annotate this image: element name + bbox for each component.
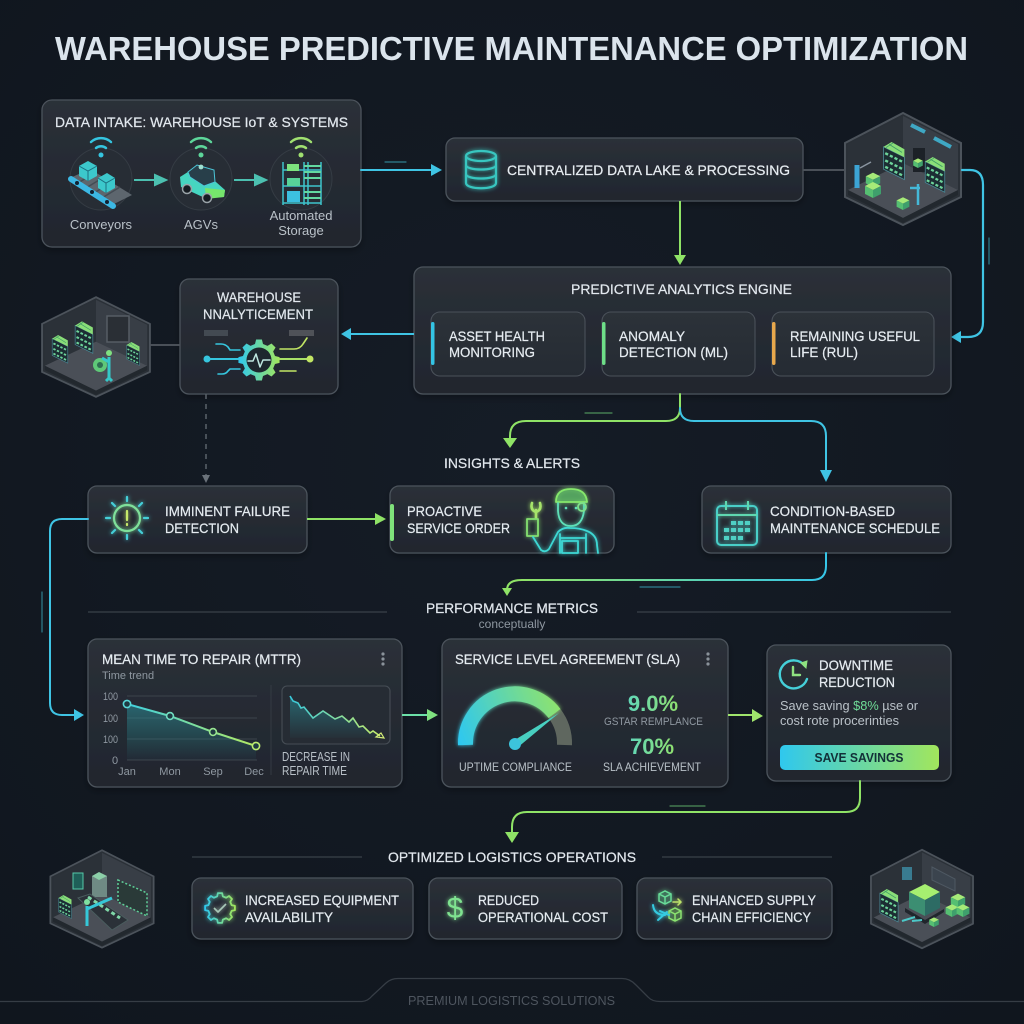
panel: imminent failure xyxy=(88,486,307,553)
card: remaining useful life xyxy=(772,312,934,376)
panel: warehouse analytics xyxy=(180,279,338,394)
icon: menu dots xyxy=(381,652,385,666)
title: WAREHOUSE PREDICTIVE MAINTENANCE OPTIMIZATION xyxy=(55,30,968,67)
panel: predictive analytics engine xyxy=(414,267,951,394)
arrow: MTTR to SLA xyxy=(402,709,438,721)
heading: warehouse: WAREHOUSE xyxy=(217,289,301,305)
panel: downtime reduction xyxy=(767,645,951,781)
card: anomaly detection xyxy=(602,312,755,376)
gauge: uptime compliance xyxy=(465,694,565,750)
panel: proactive service order xyxy=(390,486,614,553)
arrow: dashed down to imminent failure xyxy=(202,394,210,483)
label: proactive: PROACTIVE xyxy=(407,503,482,519)
label: automated storage: Automated xyxy=(270,208,332,223)
card: reduced operational cost xyxy=(429,878,622,939)
card: asset health: MONITORING xyxy=(449,344,535,360)
card: increased equipment availability xyxy=(192,878,413,939)
subheading: conceptually: conceptually xyxy=(479,617,545,631)
icon: menu dots xyxy=(706,652,710,666)
isometric room: left xyxy=(42,297,150,397)
label: reduced cost: OPERATIONAL COST xyxy=(478,909,608,925)
panel: data intake xyxy=(42,100,361,247)
heading: analytics engine: PREDICTIVE ANALYTICS ENGINE xyxy=(571,281,792,297)
icon: alert sun xyxy=(106,497,148,539)
isometric room: bottom left xyxy=(50,850,154,948)
label: increased equipment: INCREASED EQUIPMENT xyxy=(245,892,399,908)
card: remaining useful life: REMAINING USEFUL xyxy=(790,328,920,344)
label: conveyors: Conveyors xyxy=(70,217,133,232)
description: Save saving $8% µse or xyxy=(780,699,917,713)
mini chart: decrease in repair time xyxy=(282,686,390,744)
arrow: left return to MTTR xyxy=(42,519,88,721)
label: SLA achievement: SLA ACHIEVEMENT xyxy=(603,760,702,774)
footer frame and label: PREMIUM LOGISTICS SOLUTIONS xyxy=(408,994,615,1008)
footer frame and label xyxy=(0,978,1024,1008)
button: save savings xyxy=(780,745,939,770)
heading: insights and alerts: INSIGHTS & ALERTS xyxy=(444,455,580,471)
label: enhanced supply chain: CHAIN EFFICIENCY xyxy=(692,909,812,925)
label: condition-based: MAINTENANCE SCHEDULE xyxy=(770,520,940,536)
icon: gear with pulse xyxy=(204,330,314,381)
line chart: MTTR trend: 100 xyxy=(103,691,118,703)
heading: optimized logistics operations: OPTIMIZED LOGISTICS OPERATIONS xyxy=(388,849,636,865)
label: enhanced supply chain: ENHANCED SUPPLY xyxy=(692,892,817,908)
label: decrease in repair time: REPAIR TIME xyxy=(282,764,347,778)
card: remaining useful life: LIFE (RUL) xyxy=(790,344,858,360)
metric: 9.0%: 9.0% xyxy=(628,691,678,716)
label: automated storage: Storage xyxy=(278,223,324,238)
arrow: lake to engine xyxy=(674,201,686,265)
arrow: engine fork xyxy=(503,394,832,482)
label: imminent failure: DETECTION xyxy=(165,520,239,536)
line chart: MTTR trend: Jan xyxy=(118,766,136,778)
connector: room to warehouse analytics xyxy=(150,344,180,346)
icon: gear check xyxy=(205,893,235,923)
card: anomaly detection: DETECTION (ML) xyxy=(619,344,728,360)
heading: MTTR: MEAN TIME TO REPAIR (MTTR) xyxy=(102,651,301,667)
line chart: MTTR trend xyxy=(103,691,264,778)
heading: performance metrics: PERFORMANCE METRICS xyxy=(426,600,598,616)
button: save savings: SAVE SAVINGS xyxy=(814,751,904,765)
line chart: MTTR trend: 100 xyxy=(103,713,118,725)
arrow: SLA to downtime xyxy=(728,709,763,722)
label: imminent failure: IMMINENT FAILURE xyxy=(165,503,290,519)
icon: clock xyxy=(780,660,807,688)
label: proactive: SERVICE ORDER xyxy=(407,520,510,536)
line chart: MTTR trend: Sep xyxy=(203,766,223,778)
heading: downtime reduction: REDUCTION xyxy=(819,674,895,690)
icon: dollar: $ xyxy=(447,892,464,925)
label: uptime compliance: UPTIME COMPLIANCE xyxy=(459,760,572,774)
icon: database xyxy=(466,151,496,188)
label: reduced cost: REDUCED xyxy=(478,892,539,908)
label: data lake: CENTRALIZED DATA LAKE & PROCESSING xyxy=(507,162,790,178)
isometric room: top right xyxy=(845,113,961,225)
label: AGVs: AGVs xyxy=(184,217,218,232)
arrow: schedule to metrics xyxy=(502,553,826,596)
subheading: time trend: Time trend xyxy=(102,670,154,682)
icon: automated storage xyxy=(270,138,332,210)
panel: centralized data lake xyxy=(446,138,803,201)
panel: MTTR xyxy=(88,639,402,787)
icon: conveyor xyxy=(70,138,132,210)
label: decrease in repair time: DECREASE IN xyxy=(282,750,350,764)
card: asset health: ASSET HEALTH xyxy=(449,328,545,344)
arrow: downtime to outcomes xyxy=(505,781,860,843)
arrow: AGV to storage xyxy=(234,175,266,185)
card: asset health xyxy=(431,312,585,376)
isometric room: bottom right xyxy=(871,850,973,948)
metric: 70%: 70% xyxy=(630,734,674,759)
card: anomaly detection: ANOMALY xyxy=(619,328,686,344)
line chart: MTTR trend: 0 xyxy=(112,755,118,767)
line chart: MTTR trend: Mon xyxy=(159,766,181,778)
icon: technician with wrench xyxy=(527,489,598,553)
icon: calendar xyxy=(717,501,757,545)
label: GSTAR REMPLANCE: GSTAR REMPLANCE xyxy=(604,716,703,728)
heading: warehouse: NNALYTICEMENT xyxy=(203,306,313,322)
line chart: MTTR trend: 100 xyxy=(103,734,118,746)
arrow: conveyor to AGV xyxy=(134,175,166,185)
icon: supply boxes xyxy=(653,891,681,921)
arrow: room to analytics engine xyxy=(951,170,989,343)
description: cost rote procerinties xyxy=(780,714,899,728)
label: increased equipment: AVAILABILITY xyxy=(245,909,334,925)
heading: data intake: DATA INTAKE: WAREHOUSE IoT & SYSTEMS xyxy=(55,114,348,130)
label: condition-based: CONDITION-BASED xyxy=(770,503,895,519)
heading: downtime reduction: DOWNTIME xyxy=(819,657,893,673)
arrow: imminent to proactive xyxy=(307,513,386,525)
panel: SLA xyxy=(442,639,728,787)
line chart: MTTR trend: Dec xyxy=(244,766,264,778)
panel: condition-based schedule xyxy=(702,486,951,553)
card: enhanced supply chain xyxy=(637,878,832,939)
arrow: engine to warehouse analytics xyxy=(341,328,414,340)
heading: SLA: SERVICE LEVEL AGREEMENT (SLA) xyxy=(455,651,680,667)
icon: AGV xyxy=(170,138,232,210)
arrow: intake to data lake xyxy=(361,162,442,176)
connector: lake to warehouse isometric xyxy=(803,169,845,171)
